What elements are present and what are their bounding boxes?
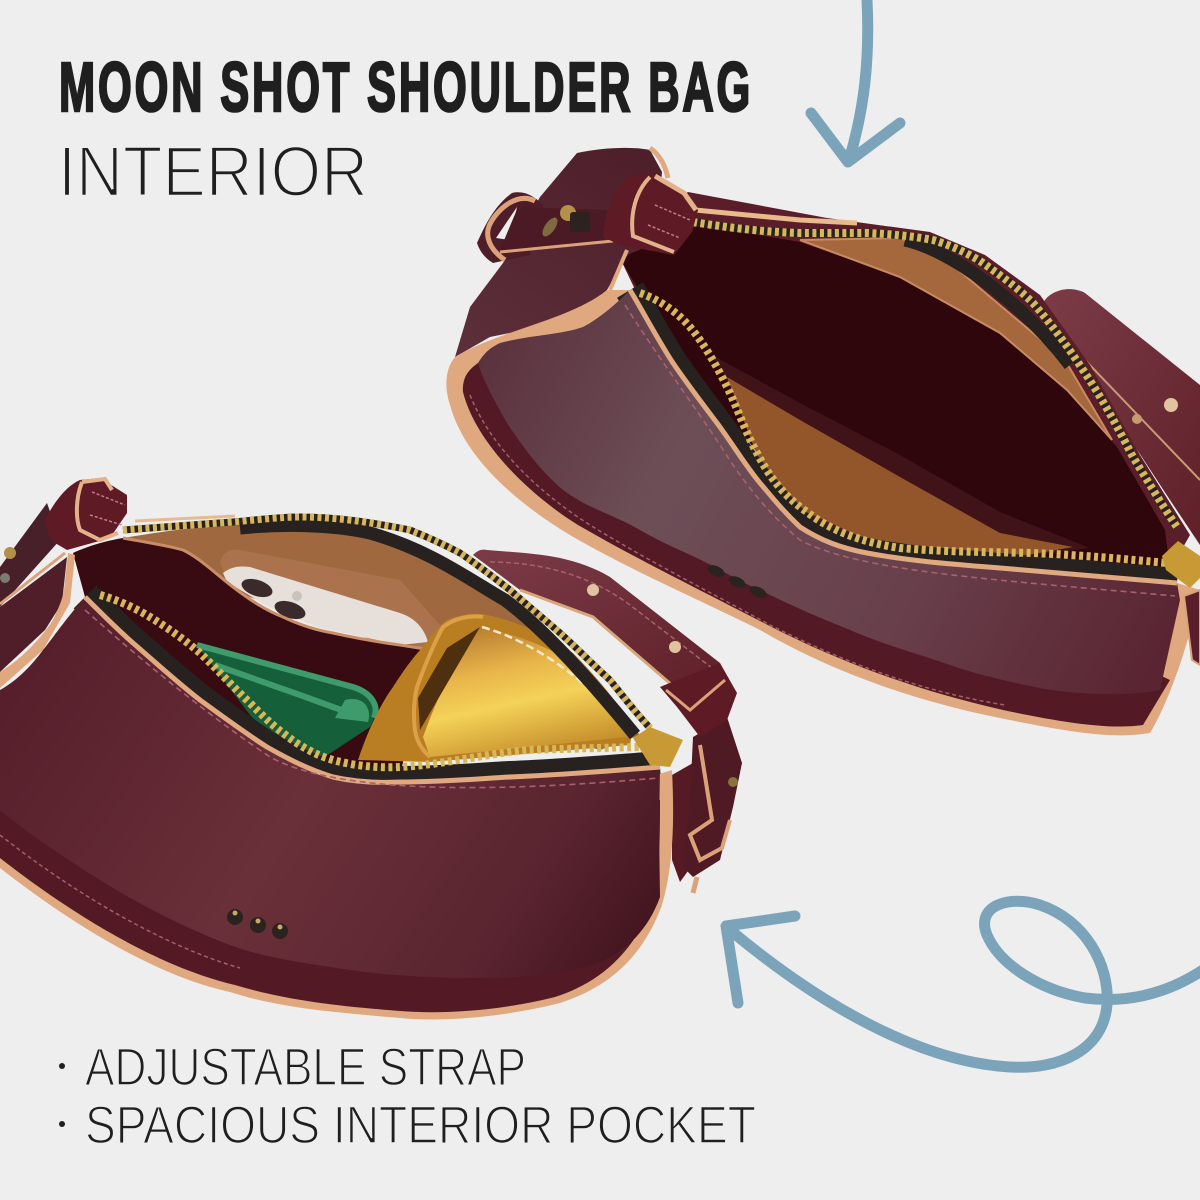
lower bag: filled with phone, wallet and pouch <box>0 478 742 1019</box>
bag side panel <box>672 763 696 882</box>
left gusset <box>0 557 67 672</box>
front lip <box>0 800 660 1012</box>
rivets <box>227 909 288 939</box>
pocket suede <box>727 377 1073 560</box>
panel stitching <box>625 305 1175 596</box>
strap bits with snap <box>0 503 65 607</box>
strap lower end <box>683 717 742 893</box>
pocket binding <box>123 538 432 650</box>
strap right <box>1043 289 1200 545</box>
front panel binding <box>85 597 660 782</box>
upper bag: open and empty <box>446 148 1200 735</box>
upper zipper binding <box>695 210 857 223</box>
lower zipper tape <box>630 290 1177 583</box>
front panel leather <box>0 597 660 978</box>
rear interior <box>620 225 1170 570</box>
panel stitching <box>85 610 658 788</box>
strap snaps <box>587 584 681 653</box>
upper zipper tape <box>905 240 1070 365</box>
title: MOON SHOT SHOULDER BAG <box>59 48 750 127</box>
strap right <box>473 550 720 690</box>
upper zipper tape <box>240 525 635 735</box>
upper zipper teeth underlay <box>693 222 1177 527</box>
lower zipper teeth <box>100 595 640 767</box>
strap keeper <box>660 663 737 737</box>
bottom right strap tip <box>1184 590 1200 665</box>
keeper loop <box>45 478 127 550</box>
left rim band <box>0 553 75 688</box>
interior suede upper <box>800 238 1112 440</box>
phone case <box>220 550 440 650</box>
front rim <box>446 290 1200 735</box>
rear upper strip <box>620 192 1190 570</box>
lip stitching <box>0 835 240 968</box>
front rim <box>0 770 673 1019</box>
left gusset <box>455 148 690 357</box>
subtitle: INTERIOR <box>58 133 368 212</box>
upper zipper teeth <box>693 222 1177 527</box>
bullet: spacious interior pocket: SPACIOUS INTERIOR POCKET <box>85 1096 756 1155</box>
inner pocket lining <box>73 538 430 775</box>
green wallet <box>197 645 376 760</box>
arrow: top pointing to upper bag <box>811 0 900 162</box>
lip stitching <box>470 395 1005 705</box>
phone <box>223 567 428 645</box>
arrow: looped arrow pointing to lower bag <box>726 901 1200 1067</box>
upper zipper teeth <box>123 517 650 728</box>
upper zipper teeth underlay <box>123 517 650 728</box>
zipper pull <box>633 727 683 767</box>
zipper pull <box>1162 541 1200 588</box>
strap loop with snap <box>477 192 613 263</box>
front panel binding <box>630 290 1177 583</box>
lower zipper tape <box>85 597 660 782</box>
pocket seam <box>712 355 1090 560</box>
rivets <box>706 563 768 600</box>
front lip <box>463 363 1170 727</box>
keeper loop <box>603 174 698 255</box>
interior suede <box>123 522 640 750</box>
upper zipper binding <box>135 516 235 521</box>
front panel leather <box>478 290 1180 694</box>
yellow pouch <box>358 614 633 762</box>
lower zipper teeth <box>640 293 1167 563</box>
bullet: adjustable strap: ADJUSTABLE STRAP <box>85 1038 526 1097</box>
feature list <box>59 1038 756 1155</box>
